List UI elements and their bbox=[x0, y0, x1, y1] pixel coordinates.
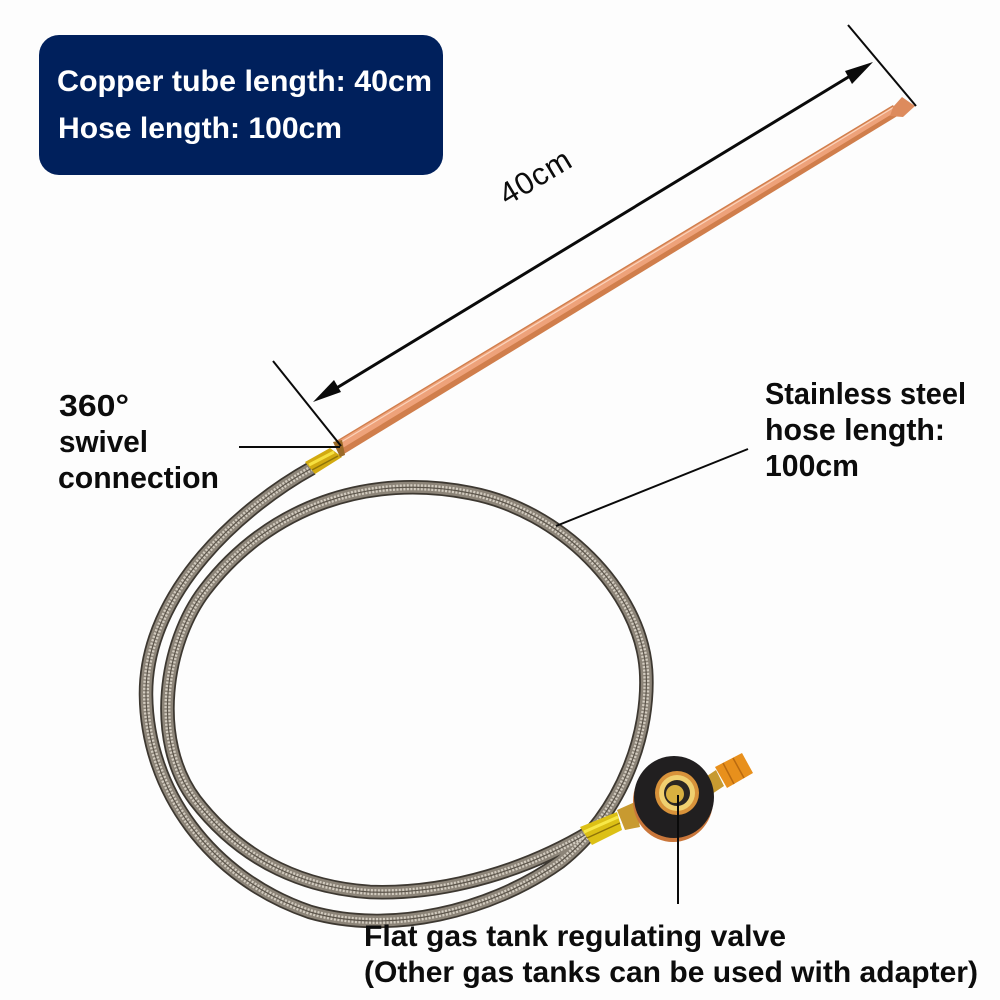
callout: swivel connection: 360° bbox=[59, 388, 129, 423]
icon: hose-end brass ferrule bbox=[580, 802, 640, 845]
dimension lines bbox=[273, 25, 916, 446]
copper tube bbox=[336, 97, 915, 454]
regulating valve bbox=[580, 753, 753, 845]
callout: swivel connection bbox=[58, 388, 340, 495]
icon: black rubber disc bbox=[634, 756, 714, 838]
label: 40cm: 40cm bbox=[493, 142, 577, 212]
callout: swivel connection: connection bbox=[58, 460, 219, 495]
callout: stainless steel hose bbox=[556, 376, 966, 526]
callout: swivel connection: swivel bbox=[59, 424, 148, 459]
callout: regulating valve bbox=[364, 795, 978, 989]
hose: stainless steel braided hose bbox=[146, 468, 646, 921]
panel: length summary bbox=[39, 35, 443, 175]
callout: stainless steel hose: hose length: bbox=[765, 412, 945, 447]
callout: stainless steel hose: Stainless steel bbox=[765, 376, 966, 411]
callout: regulating valve: Flat gas tank regulating valve bbox=[364, 920, 786, 953]
brass ferrule at swivel bbox=[305, 440, 345, 474]
callout: regulating valve: (Other gas tanks can be used with adapter) bbox=[364, 956, 978, 989]
icon: valve side knob bbox=[704, 753, 753, 794]
panel: length summary: Copper tube length: 40cm bbox=[57, 65, 432, 98]
callout: stainless steel hose: 100cm bbox=[765, 448, 859, 483]
panel: length summary: Hose length: 100cm bbox=[58, 112, 342, 145]
